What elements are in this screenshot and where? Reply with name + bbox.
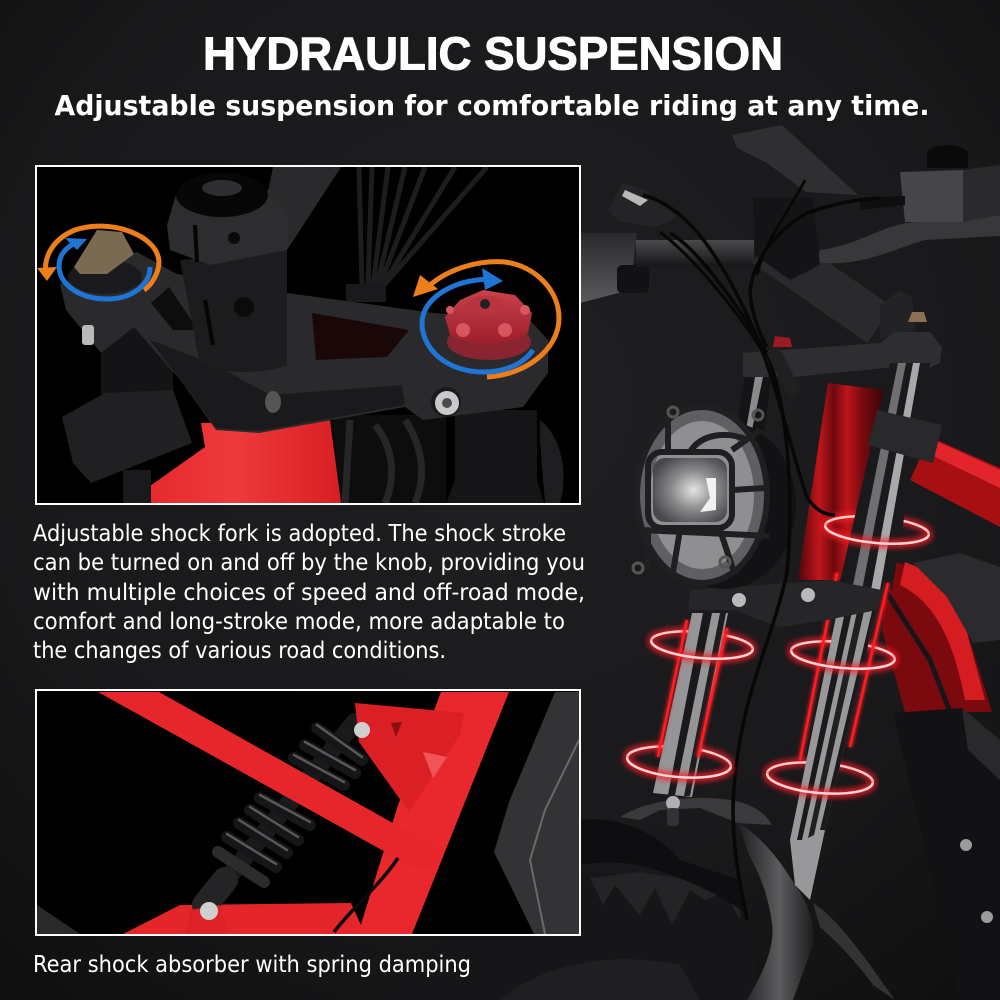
fork guard <box>62 390 192 483</box>
rings back half <box>627 513 930 783</box>
black mudguard <box>580 819 748 915</box>
front tyre <box>375 872 760 1000</box>
text block: fork description: Adjustable shock fork is adopted. The shock stroke <box>33 521 566 547</box>
cables <box>643 180 880 920</box>
right fork <box>446 410 544 503</box>
icon: left dial rotation arrows <box>37 226 159 299</box>
clamp bolts <box>265 387 461 417</box>
triple clamp <box>60 252 548 433</box>
left fork lower <box>653 613 728 797</box>
text block: fork description: the changes of various road conditions. <box>33 638 446 664</box>
panel: rear shock photo <box>36 690 580 935</box>
text block: fork description <box>33 521 585 664</box>
right fork lower <box>790 607 877 900</box>
headlight <box>633 407 796 589</box>
fender stay and outer fender <box>620 798 895 1000</box>
red frame <box>151 420 341 503</box>
fender bolt <box>666 796 680 826</box>
handlebar and controls <box>580 145 1000 347</box>
fork left lower tube <box>123 470 151 503</box>
top tube <box>98 692 392 851</box>
battery housing lower <box>893 708 1000 1000</box>
left fork <box>101 327 173 395</box>
cable <box>334 858 398 932</box>
small silver switch <box>82 325 94 345</box>
seat tube <box>358 692 509 934</box>
rear tyre <box>37 905 80 934</box>
red down tube <box>882 560 992 712</box>
mounting bracket <box>355 703 464 812</box>
wire bundle <box>346 167 487 302</box>
top crown <box>743 332 942 377</box>
panel: front fork knob photo <box>36 166 580 504</box>
brake disc and wheel behind <box>334 415 563 503</box>
rings front half <box>626 525 929 798</box>
illustration: e-bike front end <box>375 125 1000 1000</box>
text block: fork description: comfort and long-stroke mode, more adaptable to <box>33 609 565 635</box>
display <box>732 125 858 195</box>
title: HYDRAULIC SUSPENSION <box>203 28 783 80</box>
lower crown <box>688 580 882 627</box>
red head tube <box>798 383 883 580</box>
left adjuster dial <box>68 230 142 294</box>
clamp windows <box>312 313 409 360</box>
text block: fork description: can be turned on and off by the knob, providing you <box>33 550 585 576</box>
fork red edge lights <box>658 573 888 760</box>
caption: rear shock: Rear shock absorber with spring damping <box>33 952 471 978</box>
icon: red knob rotation arrows <box>413 262 559 377</box>
right fork upper <box>838 363 930 590</box>
icon: rear coil spring <box>205 722 362 905</box>
stem <box>167 173 287 372</box>
lower stay <box>123 903 365 934</box>
battery housing upper <box>913 553 1000 643</box>
shock bolts <box>354 722 370 738</box>
red top tube <box>910 437 1000 527</box>
fork clamp <box>868 410 942 463</box>
angled frame tube <box>262 167 341 250</box>
red knob <box>445 290 532 360</box>
text block: fork description: with multiple choices of speed and off-road mode, <box>33 580 585 606</box>
subtitle: Adjustable suspension for comfortable riding at any time. <box>54 89 930 122</box>
battery side <box>494 692 579 934</box>
left fork upper <box>736 377 772 430</box>
